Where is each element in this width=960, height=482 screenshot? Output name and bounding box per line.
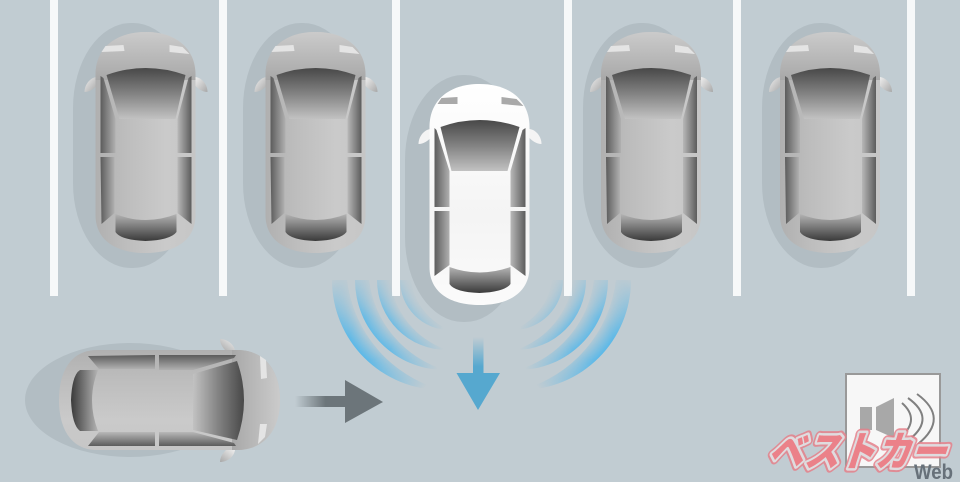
arrow: reversing direction <box>456 337 500 410</box>
parking lines <box>50 0 915 296</box>
parked car 5 <box>769 32 892 253</box>
icon: warning sound <box>846 374 940 467</box>
parked car 1 <box>84 32 208 253</box>
arrow: passing car direction <box>295 380 383 423</box>
parked car 2 <box>254 32 378 253</box>
sensor waves right <box>524 280 631 387</box>
sensor waves left <box>332 280 438 387</box>
reversing white car <box>418 84 542 305</box>
parked car 4 <box>590 32 713 253</box>
passing car <box>59 339 280 462</box>
